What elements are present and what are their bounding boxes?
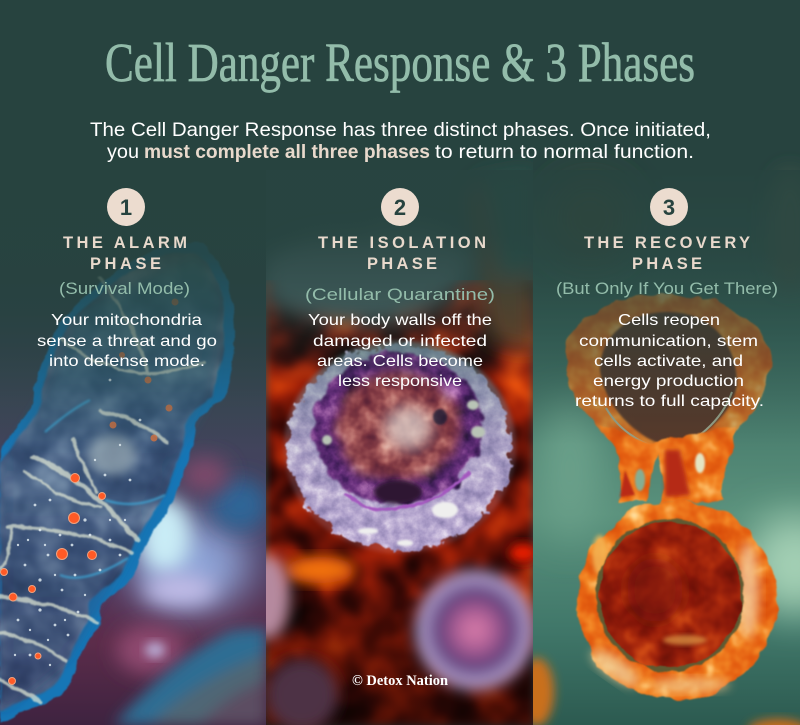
- heading: the recovery phase: [584, 234, 750, 273]
- description: recovery: energy production: [593, 373, 744, 390]
- panel: recovery phase image: [533, 266, 800, 725]
- intro text: The Cell Danger Response has three distinct phases. Once initiated,: [90, 120, 711, 141]
- blurred mitochondrion: [114, 628, 266, 725]
- blurred cell: bottom left: [520, 658, 554, 725]
- heading: the isolation phase: THE ISOLATION: [318, 234, 486, 252]
- description: recovery: Cells reopen: [618, 312, 720, 329]
- description: alarm: [37, 312, 217, 370]
- heading: the isolation phase: PHASE: [367, 255, 437, 273]
- mitochondrion: [0, 242, 235, 724]
- description: isolation: less responsive: [338, 373, 462, 390]
- intro text: to return to normal function.: [435, 142, 694, 163]
- large cell: [284, 341, 516, 553]
- heading: the alarm phase: PHASE: [90, 255, 161, 273]
- blurred cell: bottom left: [266, 659, 338, 725]
- subtitle: survival mode: (Survival Mode): [59, 279, 190, 298]
- lower cell: [577, 500, 777, 700]
- icon: number 1: 1: [120, 195, 132, 220]
- heading: the alarm phase: [63, 234, 187, 273]
- icon: number 2: 2: [394, 195, 406, 220]
- icon: number 3: 3: [663, 195, 675, 220]
- icon: number 2: [381, 188, 419, 226]
- heading: the recovery phase: THE RECOVERY: [584, 234, 750, 252]
- logo: Detox Nation: © Detox Nation: [352, 673, 449, 689]
- heading: the alarm phase: THE ALARM: [63, 234, 187, 252]
- heading: the recovery phase: PHASE: [632, 255, 702, 273]
- description: recovery: cells activate, and: [594, 353, 743, 370]
- description: isolation: damaged or infected: [313, 333, 487, 350]
- description: isolation: [308, 312, 492, 390]
- description: alarm: into defense mode.: [49, 353, 205, 370]
- icon: number 3: [650, 188, 688, 226]
- blurred cell: left: [246, 555, 290, 639]
- description: isolation: Your body walls off the: [308, 312, 492, 329]
- panel: alarm phase image: [0, 242, 266, 725]
- upper cell: [565, 295, 770, 452]
- phase 3 text column: [556, 188, 778, 410]
- stalks: [598, 425, 738, 502]
- description: recovery: [575, 312, 764, 410]
- subtitle: but only if you get there: (But Only If You Get There): [556, 279, 778, 298]
- description: recovery: returns to full capacity.: [575, 393, 764, 410]
- nucleus: [596, 519, 744, 671]
- subtitle: cellular quarantine: (Cellular Quarantine): [305, 285, 495, 304]
- panel: isolation phase image: [266, 241, 533, 725]
- blurred cell: bottom right: [748, 719, 800, 725]
- description: alarm: Your mitochondria: [51, 312, 202, 329]
- description: alarm: sense a threat and go: [37, 333, 217, 350]
- intro text: must complete all three phases: [144, 142, 430, 163]
- phase 1 text column: [37, 188, 217, 370]
- intro text: you: [107, 142, 139, 163]
- phase 2 text column: [305, 188, 495, 390]
- description: recovery: communication, stem: [579, 333, 758, 350]
- heading: the isolation phase: [318, 234, 486, 273]
- description: isolation: areas. Cells become: [317, 353, 483, 370]
- blurred cell: right: [415, 570, 535, 690]
- icon: number 1: [107, 188, 145, 226]
- intro text: [90, 120, 711, 163]
